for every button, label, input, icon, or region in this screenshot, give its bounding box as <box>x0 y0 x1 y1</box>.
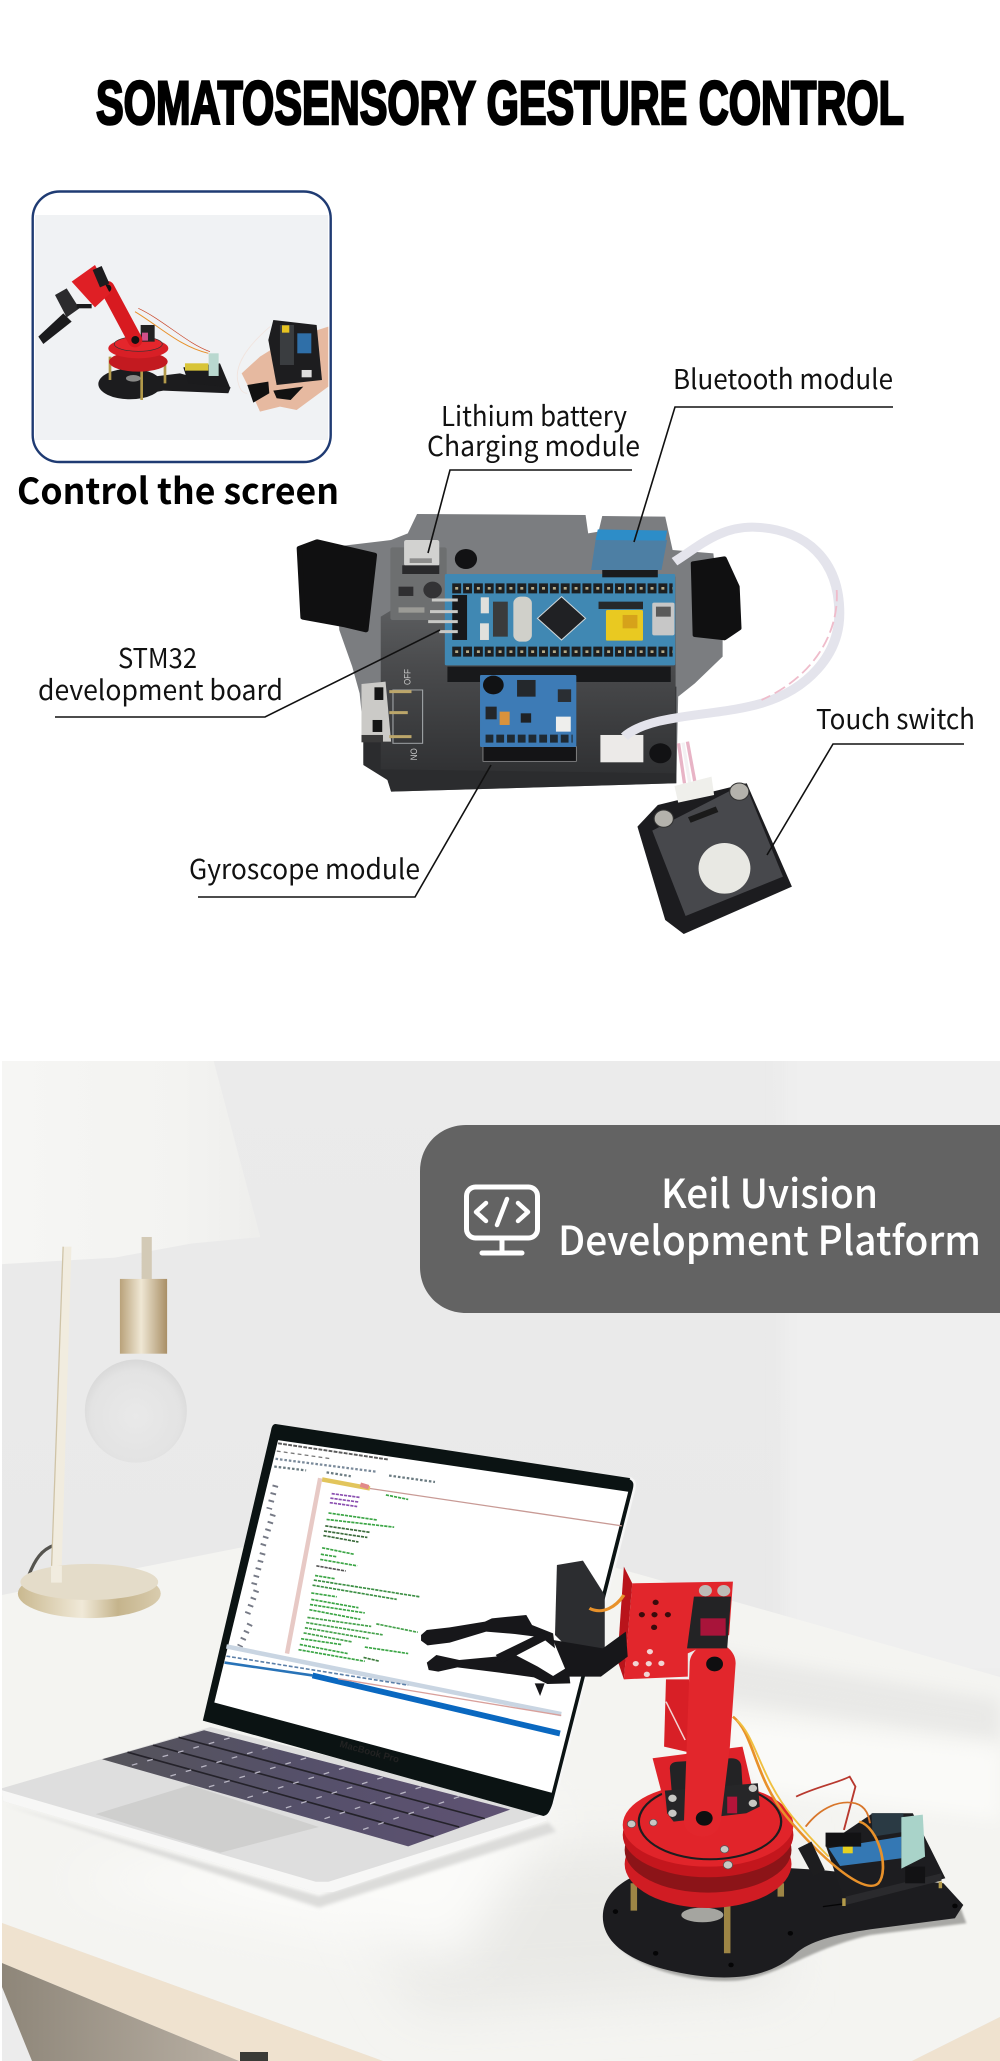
wall background <box>2 1061 788 1616</box>
shoulder plate <box>624 1582 733 1679</box>
upper servo <box>687 1585 731 1648</box>
servo plug <box>798 1842 825 1877</box>
table top <box>2 1512 1000 2061</box>
lamp pole <box>52 1246 72 1566</box>
label: STM32 development board <box>38 630 440 717</box>
label: lithium battery charging module: Charging module <box>427 424 640 464</box>
laptop lid <box>203 1424 635 1816</box>
power switch: OFF <box>402 669 412 685</box>
robot base plate <box>603 1863 963 1977</box>
servo cable <box>589 1595 624 1611</box>
lower servos <box>665 1758 760 1822</box>
banner background <box>420 1125 1000 1313</box>
label: touch switch <box>767 697 975 855</box>
table wood edge <box>2 1923 383 2061</box>
lamp base <box>18 1564 161 1618</box>
dark base plate <box>363 687 676 792</box>
touch switch <box>637 777 792 934</box>
banner: keil uvision <box>420 1125 1000 1313</box>
label: STM32 development board: STM32 <box>118 636 197 676</box>
gripper <box>421 1615 628 1696</box>
lamp bulb <box>85 1360 187 1450</box>
dark floor detail <box>240 2052 268 2061</box>
lamp cable <box>29 1545 54 1576</box>
plate flap <box>617 1567 632 1679</box>
upper column <box>664 1679 693 1753</box>
black header socket <box>447 667 671 682</box>
black ring <box>639 1784 781 1859</box>
lid highlight <box>543 1478 635 1819</box>
banner heading: Keil Uvision <box>661 1162 878 1220</box>
laptop logo: MacBook Pro <box>338 1739 400 1766</box>
laptop screen <box>214 1440 628 1793</box>
laptop shadow <box>51 1819 555 1908</box>
laptop <box>2 1424 635 1908</box>
upper disc top <box>623 1783 793 1867</box>
inset caption: Control the screen <box>17 463 339 515</box>
plate holes <box>639 1600 671 1630</box>
gyroscope module <box>480 675 576 761</box>
panel: control the screen photo <box>33 192 331 462</box>
inset card border <box>33 192 331 462</box>
icon: code monitor <box>466 1187 538 1253</box>
code lines <box>298 1494 420 1661</box>
gap between discs <box>624 1844 792 1893</box>
main PCB <box>381 577 676 773</box>
touch switch wires <box>679 742 695 783</box>
label: lithium battery charging module: Lithium battery <box>441 394 627 434</box>
velcro straps <box>299 542 374 630</box>
table soft light and shadow <box>60 1640 1000 2010</box>
robot wires <box>733 1717 883 1886</box>
keyboard <box>102 1730 510 1846</box>
lower bracket <box>653 1747 756 1817</box>
upper disc side <box>623 1793 793 1877</box>
lamp shade <box>2 1061 194 1264</box>
robot arm <box>421 1561 966 1981</box>
disc screws <box>627 1819 733 1869</box>
label: gyroscope module <box>189 765 491 897</box>
lamp <box>2 1061 194 1574</box>
gray mounting plate <box>336 514 723 792</box>
table leg <box>2 1987 32 2061</box>
robot main arm link <box>684 1643 736 1837</box>
bluetooth module on device <box>591 529 667 577</box>
table wood edge right <box>912 2017 1000 2061</box>
bulb holder <box>142 1237 152 1280</box>
banner subheading: Development Platform <box>558 1209 981 1267</box>
under table <box>2 1963 239 2061</box>
lower red disc <box>624 1856 792 1908</box>
plate screws <box>613 1904 958 1967</box>
IDE toolbars <box>274 1443 622 1526</box>
charging module <box>390 540 447 620</box>
label: gyroscope module: Gyroscope module <box>189 847 420 887</box>
motor <box>681 1908 723 1922</box>
inset: small robot arm <box>38 265 328 412</box>
tree divider <box>287 1478 320 1654</box>
brass posts <box>634 1883 781 1953</box>
control board <box>826 1813 945 1906</box>
white cable connector <box>600 735 643 762</box>
robot base shadow <box>619 1908 967 1982</box>
STM32 development board <box>428 574 675 665</box>
panel: desk photo <box>2 1040 1000 2061</box>
label: bluetooth module <box>634 357 893 542</box>
laptop base <box>2 1727 547 1892</box>
device: gesture control board <box>299 514 839 934</box>
gripper servo <box>555 1561 605 1651</box>
project tree <box>240 1485 276 1646</box>
mounting screws <box>455 549 672 763</box>
arm hubs <box>696 1657 723 1826</box>
output window bars <box>225 1646 561 1733</box>
power switch <box>361 669 423 760</box>
label: STM32 development board: development board <box>38 668 283 708</box>
ribbon cable <box>624 527 839 737</box>
trackpad <box>96 1785 319 1853</box>
plate light holes <box>633 1649 664 1677</box>
label: bluetooth module: Bluetooth module <box>673 357 893 397</box>
label: touch switch: Touch switch <box>816 697 975 737</box>
inset photo background <box>35 215 328 440</box>
plate slot <box>823 1903 848 1907</box>
label: lithium battery charging module <box>427 394 640 553</box>
power switch: ON <box>408 748 419 760</box>
